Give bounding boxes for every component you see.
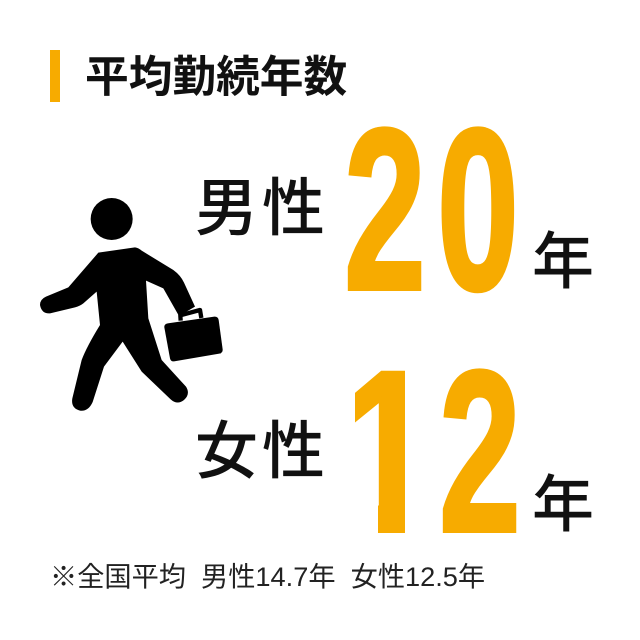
big number: male 20: [344, 81, 519, 338]
title: 平均勤続年数: [85, 53, 347, 102]
big number: male 20: 0: [437, 81, 519, 338]
heading accent bar: [50, 50, 60, 102]
big number: female 12: 2: [439, 323, 521, 580]
big number: female 12: 1: [339, 324, 437, 580]
unit: female years: 年: [532, 471, 594, 540]
big number: male 20: 2: [344, 81, 426, 338]
unit: male years: 年: [532, 228, 594, 297]
big number: female 12: [355, 368, 516, 533]
label: female: 女性: [195, 417, 325, 487]
label: male: 男性: [195, 174, 325, 244]
icon: walking businessman with briefcase: [40, 198, 223, 411]
footnote: national average: ※全国平均 男性14.7年 女性12.5年: [50, 561, 485, 592]
